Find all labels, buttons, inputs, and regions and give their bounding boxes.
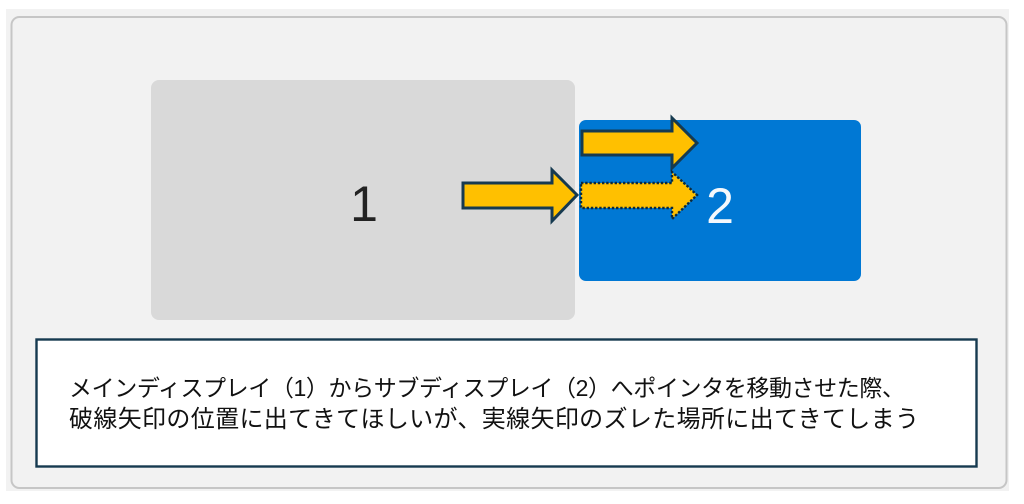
text: description line 2: 破線矢印の位置に出てきてほしいが、実線矢印のズレた場所に出てきてしまう	[69, 406, 919, 433]
panel: sub display 2	[579, 120, 861, 281]
label: display number 2: 2	[706, 178, 734, 234]
label: display number 1: 1	[350, 176, 378, 232]
arrow: dashed arrow at desired position	[581, 172, 697, 219]
callout: description text box	[36, 340, 976, 466]
arrow: solid arrow at shifted position	[582, 118, 697, 168]
panel: main display 1	[151, 80, 575, 320]
arrow: solid arrow leaving main display	[463, 170, 577, 221]
text: description line 1: メインディスプレイ（1）からサブディスプレイ（2）へポインタを移動させた際、	[69, 375, 905, 401]
